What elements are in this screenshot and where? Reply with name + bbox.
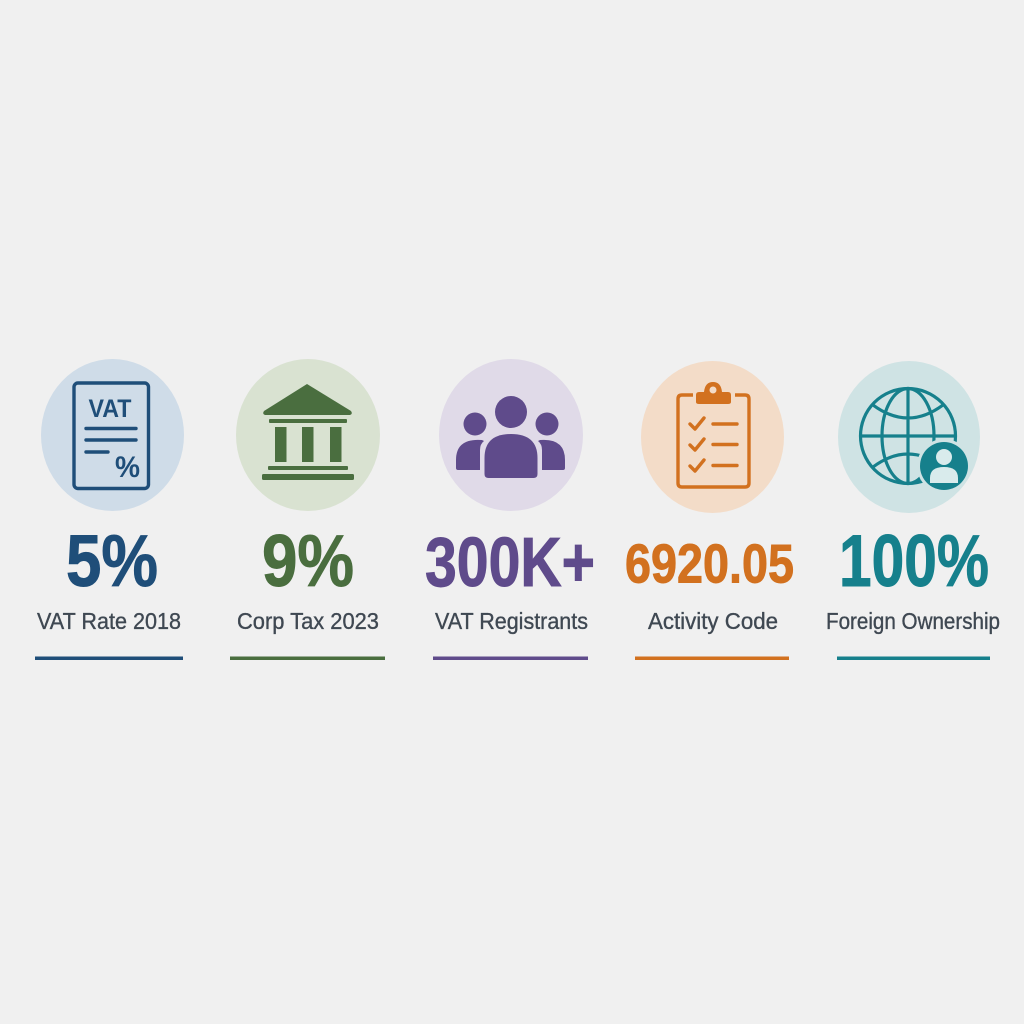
underline (635, 656, 789, 660)
icon: checklist clipboard (641, 361, 784, 513)
underline (230, 656, 385, 660)
panel: foreign ownership (826, 361, 1000, 660)
stat: 5%: 5% (66, 521, 158, 602)
panel: VAT rate (35, 359, 184, 660)
icon: group of people (439, 359, 583, 511)
panel: VAT registrants (425, 359, 595, 660)
stat: 100%: 100% (839, 521, 989, 602)
stat: 300K+: 300K+ (425, 523, 595, 601)
icon: government building (236, 359, 380, 511)
underline (837, 656, 990, 660)
icon: globe with person badge (838, 361, 980, 513)
label: Activity Code: Activity Code (648, 608, 778, 634)
label: Corp Tax 2023: Corp Tax 2023 (237, 608, 379, 634)
panel: activity code (625, 361, 794, 660)
stat: 9%: 9% (262, 521, 354, 602)
panel: corporate tax (230, 359, 385, 660)
label: VAT Registrants: VAT Registrants (435, 608, 588, 634)
icon: VAT document: % (115, 451, 140, 484)
icon: VAT document (41, 359, 184, 511)
underline (35, 656, 183, 660)
icon: VAT document: VAT (88, 395, 132, 423)
underline (433, 656, 588, 660)
label: Foreign Ownership: Foreign Ownership (826, 608, 1000, 634)
label: VAT Rate 2018: VAT Rate 2018 (37, 608, 181, 634)
stat: 6920.05: 6920.05 (625, 532, 794, 594)
